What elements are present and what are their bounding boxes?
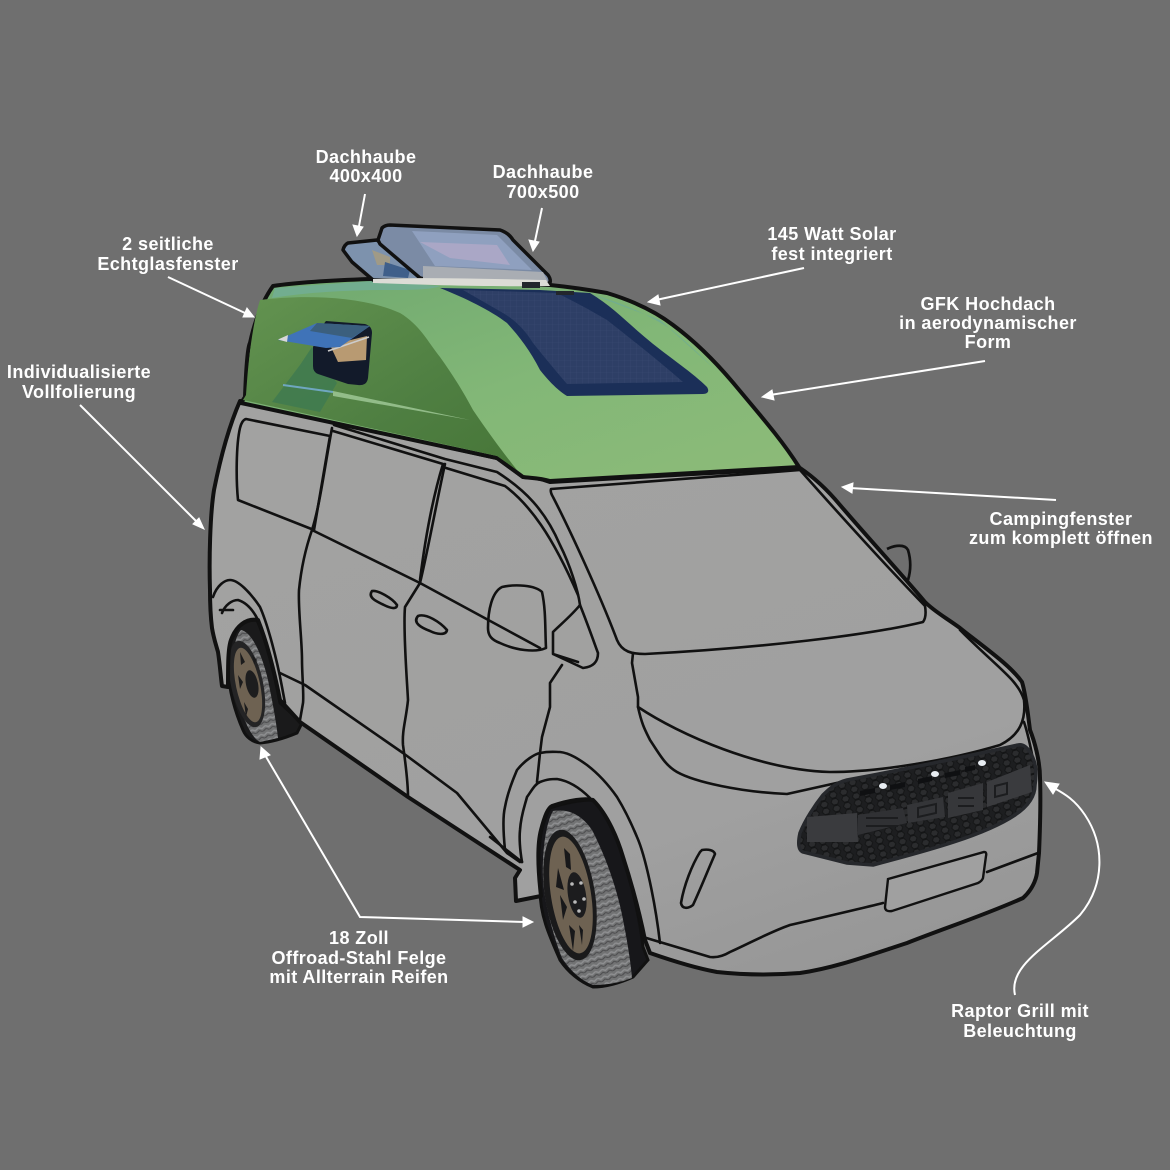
grille upper slots [860, 765, 975, 796]
hatch hinge frame [373, 278, 550, 286]
label: 2 seitliche Echtglasfenster: 2 seitliche [122, 234, 214, 254]
label: GFK Hochdach [899, 294, 1077, 352]
lower front sill [490, 837, 522, 862]
label: Raptor Grill [951, 1001, 1089, 1041]
front wheel [535, 800, 648, 987]
label: Campingfenster: zum komplett öffnen [969, 528, 1153, 548]
headlight [638, 707, 850, 794]
sill line [280, 673, 520, 862]
side mirror [488, 585, 546, 650]
grille FORD bar [807, 765, 1032, 842]
arrow: Solar [648, 268, 804, 305]
door handles [371, 591, 397, 608]
fog slot [681, 850, 715, 908]
label: GFK Hochdach: Form [965, 332, 1011, 352]
label: Dachhaube 400x400 [316, 147, 416, 186]
arrow: GFK Hochdach [762, 361, 985, 400]
label: Individualisierte Vollfolierung: Individualisierte [7, 362, 151, 382]
vehicle illustration [210, 225, 1040, 987]
side window [278, 321, 372, 385]
label: Individualisierte Vollfolierung: Vollfolierung [22, 382, 136, 402]
GFK roof [241, 279, 799, 481]
number plate [885, 852, 986, 911]
label: 145 Watt Solar: 145 Watt Solar [767, 224, 897, 244]
label: Campingfenster: Campingfenster [990, 509, 1132, 529]
label: 18 Zoll Felge: mit Allterrain Reifen [269, 967, 449, 987]
hatch large [378, 225, 550, 283]
rear arch [213, 580, 285, 703]
grille [799, 745, 1036, 865]
arrow: Echtglasfenster [168, 277, 254, 317]
roof hatches [343, 225, 574, 295]
arrow: Raptor Grill [1014, 782, 1099, 995]
label: 18 Zoll Felge: Offroad-Stahl Felge [272, 948, 446, 968]
label: Campingfenster [969, 509, 1153, 548]
label: Raptor Grill: Raptor Grill mit [951, 1001, 1089, 1021]
label: GFK Hochdach: GFK Hochdach [920, 294, 1056, 314]
label: Dachhaube 700x500: Dachhaube [493, 162, 593, 182]
body shell [210, 401, 1040, 974]
windscreen [551, 470, 926, 654]
label: 2 seitliche Echtglasfenster: Echtglasfenster [97, 254, 239, 274]
arrow: Dachhaube 400x400 [353, 194, 365, 236]
grille lights [879, 760, 986, 789]
label: 145 Watt Solar [767, 224, 897, 264]
teal top strip [272, 281, 440, 298]
reflection [272, 347, 337, 412]
arrow: Felge [260, 747, 533, 927]
arrow: Campingfenster [842, 483, 1056, 500]
label: Raptor Grill: Beleuchtung [963, 1021, 1077, 1041]
arrow: Dachhaube 700x500 [529, 208, 542, 251]
label: 145 Watt Solar: fest integriert [771, 244, 893, 264]
lower bumper [643, 903, 883, 957]
label: GFK Hochdach: in aerodynamischer [899, 313, 1077, 333]
solar panel [463, 290, 683, 384]
door seam [537, 665, 562, 782]
label: Dachhaube 700x500: 700x500 [506, 182, 580, 202]
label: 18 Zoll Felge: 18 Zoll [329, 928, 389, 948]
solar surround [440, 288, 708, 396]
label: Dachhaube 700x500 [493, 162, 593, 202]
right mirror [887, 546, 910, 580]
bonnet [632, 630, 1024, 772]
hatch small [343, 240, 425, 280]
label: Dachhaube 400x400: 400x400 [329, 166, 403, 186]
label: 2 seitliche Echtglasfenster [97, 234, 239, 274]
arrow: Vollfolierung [80, 405, 204, 529]
rear wheel [222, 620, 302, 743]
front arch [504, 752, 660, 943]
dark green side panel [243, 297, 517, 470]
label: Individualisierte Vollfolierung [7, 362, 151, 402]
label: Dachhaube 400x400: Dachhaube [316, 147, 416, 167]
label: 18 Zoll Felge [269, 928, 449, 987]
body panel lines [213, 419, 1038, 957]
